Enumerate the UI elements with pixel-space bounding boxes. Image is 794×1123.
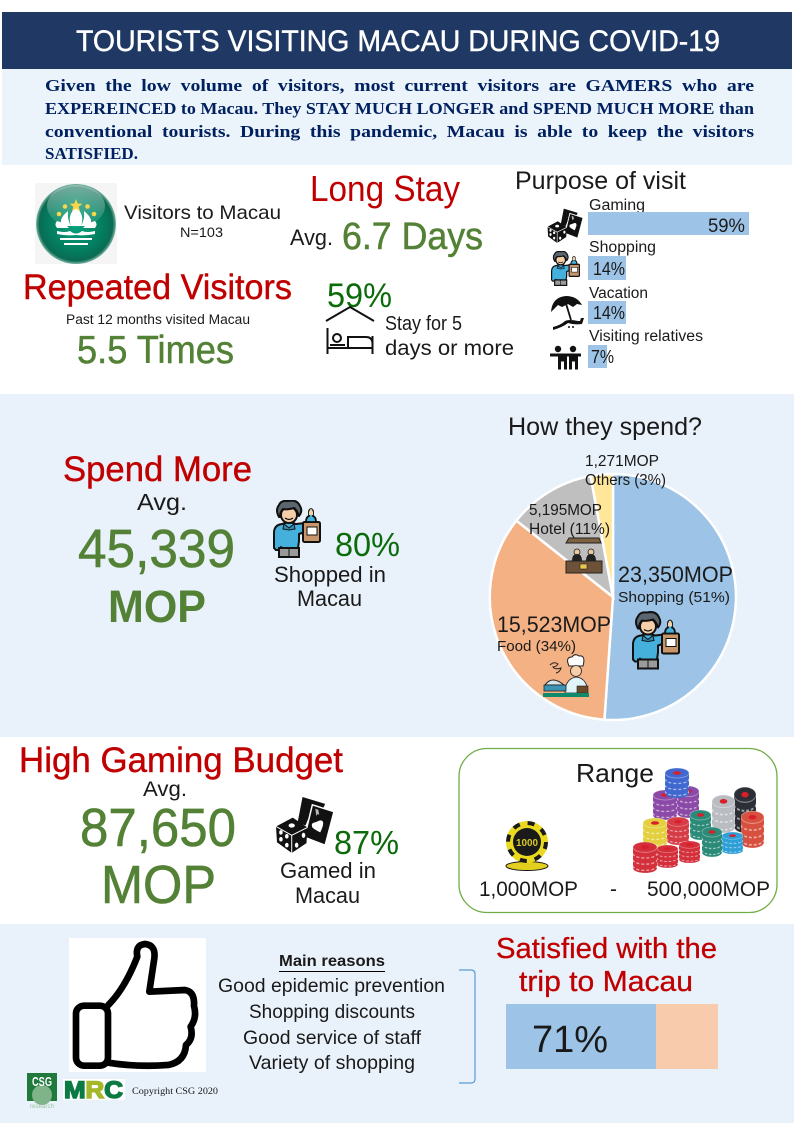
average label: Avg. xyxy=(290,225,333,250)
reason 2: Shopping discounts xyxy=(249,1001,415,1023)
gamed label line 2: Macau xyxy=(295,883,360,908)
heading: High Gaming Budget xyxy=(19,741,343,780)
row: visiting relatives: Visiting relatives xyxy=(589,328,703,345)
reasons heading: Main reasons xyxy=(279,953,385,970)
average budget value: 87,650 xyxy=(80,798,236,858)
logo: CSG xyxy=(27,1073,57,1110)
heading: long stay: Long Stay xyxy=(310,168,460,209)
icon: thumbs up xyxy=(69,938,206,1072)
heading: repeated visitors: Repeated Visitors xyxy=(23,268,292,307)
icon: chef with dish xyxy=(543,655,589,697)
label: hotel: Hotel (11%) xyxy=(529,521,610,538)
panel: spend more xyxy=(63,450,400,632)
average spend value: 45,339 xyxy=(78,519,235,579)
intro text block: conventional tourists. During this pandemic, Macau is able to keep the visitors xyxy=(45,122,754,141)
label: others: 1,271MOP xyxy=(585,453,659,470)
currency: MOP xyxy=(101,855,216,915)
range box xyxy=(459,748,777,912)
row: vacation xyxy=(588,285,648,324)
heading: Purpose of visit xyxy=(515,167,686,195)
icon: beach umbrella and lounger xyxy=(551,296,584,330)
logo: CSG: research xyxy=(30,1104,54,1110)
visitors label: Visitors to Macau xyxy=(124,202,281,224)
gamed percentage: 87% xyxy=(334,824,399,861)
past 12 months label: Past 12 months visited Macau xyxy=(66,312,250,327)
label: hotel: 5,195MOP xyxy=(529,502,602,519)
intro text block: Given the low volume of visitors, most current visitors are GAMERS who are xyxy=(45,76,755,95)
icon: house with bed xyxy=(326,307,374,354)
label: food xyxy=(497,612,611,655)
satisfaction bar: 71% xyxy=(532,1019,608,1061)
panel: satisfaction xyxy=(69,933,718,1083)
icon: single chip: 1000 xyxy=(516,838,538,849)
average label: Avg. xyxy=(137,489,187,515)
heading: How they spend? xyxy=(508,413,702,441)
long stay percentage: 59% xyxy=(327,277,392,315)
icon: Macau flag xyxy=(35,183,117,264)
title banner xyxy=(2,12,792,69)
visits value: 5.5 Times xyxy=(77,329,234,372)
row: gaming xyxy=(588,197,749,237)
icon: dice and cards xyxy=(276,797,334,853)
satisfaction bar xyxy=(506,1004,718,1069)
row: visiting relatives xyxy=(588,328,703,368)
label: shopping: Shopping (51%) xyxy=(618,589,730,606)
row: shopping xyxy=(588,239,656,280)
stay text: Stay for 5 xyxy=(385,312,462,335)
intro text block xyxy=(45,76,755,163)
footer logos xyxy=(27,1073,218,1110)
label: hotel xyxy=(529,502,610,538)
logo: MRC: MRC xyxy=(64,1077,123,1104)
stay text line 2: days or more xyxy=(385,336,514,360)
shopped label: Shopped in xyxy=(274,562,386,587)
average label: Avg. xyxy=(143,778,187,801)
currency: MOP xyxy=(108,581,206,632)
heading: Satisfied with the xyxy=(496,933,717,965)
label: others: Others (3%) xyxy=(585,472,666,489)
label: food: Food (34%) xyxy=(497,638,576,655)
reason 4: Variety of shopping xyxy=(249,1052,415,1074)
range dash: - xyxy=(610,878,617,901)
intro text block: EXPEREINCED to Macau. They STAY MUCH LONGER and SPEND MUCH MORE than xyxy=(45,99,755,118)
icon: shopper xyxy=(274,501,320,557)
label: food: 15,523MOP xyxy=(497,612,611,637)
panel: how they spend xyxy=(490,413,736,720)
row: vacation: Vacation xyxy=(589,285,648,302)
icon: shopper xyxy=(633,612,679,668)
row: shopping: 14% xyxy=(593,259,625,279)
reason 1: Good epidemic prevention xyxy=(218,975,445,997)
label: shopping: 23,350MOP xyxy=(618,562,733,587)
icon: two people xyxy=(550,346,581,370)
heading: Range xyxy=(576,758,654,788)
panel: high gaming budget xyxy=(19,741,399,915)
shopped percentage: 80% xyxy=(335,526,400,563)
copyright: Copyright CSG 2020 xyxy=(132,1087,218,1097)
row: shopping: Shopping xyxy=(589,239,656,256)
maximum value: 500,000MOP xyxy=(647,878,770,901)
icon: chip stacks xyxy=(633,768,764,873)
sample size: N=103 xyxy=(180,224,223,240)
reasons list xyxy=(218,953,445,1074)
icon: single chip xyxy=(506,821,548,870)
logo: CSG: CSG xyxy=(32,1074,52,1089)
label: shopping xyxy=(618,562,733,606)
minimum value: 1,000MOP xyxy=(479,878,578,901)
title banner: TOURISTS VISITING MACAU DURING COVID-19 xyxy=(76,25,720,58)
row: gaming: Gaming xyxy=(589,197,645,214)
heading: trip to Macau xyxy=(519,966,693,998)
row: visiting relatives: 7% xyxy=(591,347,614,367)
icon: hotel reception xyxy=(566,538,602,573)
pie chart xyxy=(490,474,736,720)
label: others xyxy=(585,453,666,489)
heading: Spend More xyxy=(63,450,252,489)
gamed label: Gamed in xyxy=(280,858,376,883)
icon: shopper xyxy=(552,251,579,285)
panel: range xyxy=(459,748,777,912)
icon: dice and cards xyxy=(548,209,583,243)
bracket arrow xyxy=(459,970,475,1083)
row: vacation: 14% xyxy=(593,303,625,323)
heading xyxy=(496,933,717,998)
average stay value: 6.7 Days xyxy=(342,216,483,258)
panel: visitor profile xyxy=(23,168,514,372)
reason 3: Good service of staff xyxy=(243,1027,422,1049)
shopped label line 2: Macau xyxy=(297,586,362,611)
intro text block: SATISFIED. xyxy=(45,144,138,163)
panel: purpose of visit xyxy=(515,167,749,370)
row: gaming: 59% xyxy=(708,216,745,237)
